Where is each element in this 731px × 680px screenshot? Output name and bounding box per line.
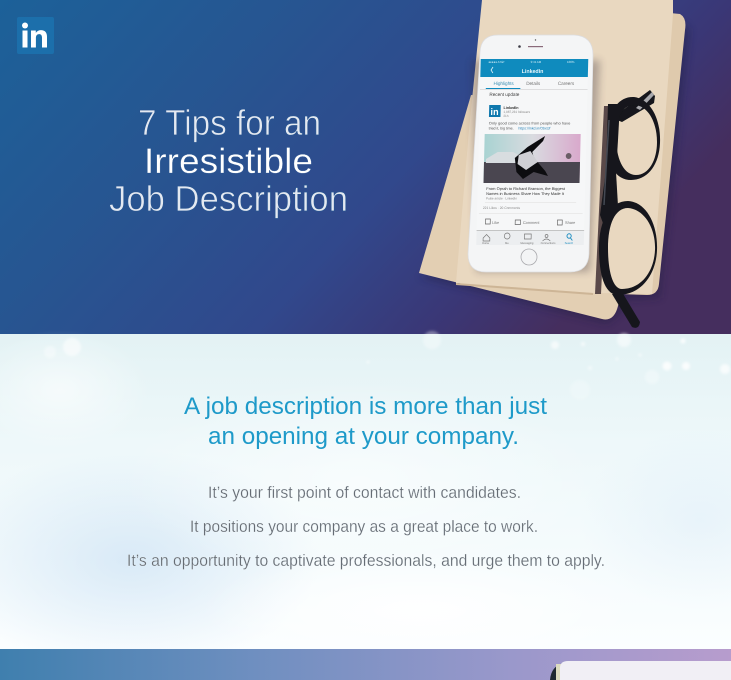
phone screen: LinkedIn: [522, 69, 543, 75]
glasses lower arm: [612, 292, 640, 328]
title line 3: Job Description: [109, 178, 348, 219]
app header: [480, 59, 588, 77]
heading: A job description is more than just: [184, 393, 547, 420]
notebook spiral: [550, 663, 564, 680]
phone screen: tried it, big time.: [489, 126, 514, 131]
phone screen: Details: [526, 81, 541, 86]
glasses bridge and hinge block: [600, 104, 620, 226]
text block: intro copy: It’s an opportunity to captivate professionals, and urge them to apply.: [127, 551, 605, 570]
text block: intro copy: It’s your first point of contact with candidates.: [208, 483, 521, 502]
tab bar: Connections: [541, 241, 556, 245]
tab bar: Messaging: [520, 241, 534, 245]
title line 1: 7 Tips for an: [138, 102, 321, 143]
panel: hero background: [0, 0, 731, 334]
notebook page: [560, 661, 731, 680]
home button: [521, 249, 537, 265]
phone screen: Pulse article · LinkedIn: [486, 196, 517, 201]
notebook: right back cover: [590, 12, 685, 295]
notebook edge: [456, 283, 593, 295]
phone screen: Names in Business Share How They Made It: [486, 192, 565, 196]
phone screen: 100%: [567, 60, 575, 64]
phone screen: ●●●●● AT&T: [488, 60, 505, 64]
heading: [184, 393, 547, 450]
phone screen: Recent update: [489, 92, 520, 97]
action row: Comment: [523, 220, 540, 225]
phone screen: https://lnkd.in/ObxtJf: [518, 126, 551, 131]
phone screen: 21h: [503, 114, 509, 118]
phone: [468, 35, 600, 272]
phone screen: 9:41 AM: [531, 60, 542, 64]
small LinkedIn badge: [489, 105, 501, 117]
phone screen: 221 Likes · 20 Comments: [483, 206, 520, 210]
glasses top arm: [612, 90, 655, 122]
glasses upper lens frame: [607, 97, 660, 180]
glasses lower lens frame: [599, 201, 657, 295]
text block: intro copy: It positions your company as a great place to work.: [190, 517, 538, 536]
phone screen: LinkedIn: [504, 106, 519, 110]
panel: next section band: [0, 649, 731, 680]
tab bar: Home: [482, 241, 490, 245]
glasses: [595, 90, 660, 328]
tabs: Highlights: [494, 81, 514, 86]
title: [109, 102, 348, 219]
text block: intro copy: [127, 483, 605, 570]
notebook: lowest: [419, 95, 640, 319]
notebook: top: [456, 0, 673, 294]
phone screen: Only good come across from people who have: [489, 121, 570, 126]
phone screen: [476, 59, 588, 245]
panel: intro section background: [0, 330, 731, 670]
bokeh: [44, 331, 730, 400]
action row: [485, 219, 575, 225]
phone screen: Careers: [558, 81, 575, 86]
heading: an opening at your company.: [208, 423, 519, 450]
tab bar: Search: [565, 241, 574, 245]
action row: Share: [565, 220, 575, 225]
glasses temple arm along the frame: [595, 106, 610, 294]
notebook shadow: [419, 20, 690, 324]
phone screen: 1,087,231 followers: [503, 110, 530, 114]
title line 2: Irresistible: [144, 142, 313, 181]
illustration: notebooks, phone and glasses: [419, 0, 690, 328]
tab bar: [476, 230, 584, 245]
icon: LinkedIn logo: [17, 17, 54, 54]
action row: Like: [492, 220, 499, 225]
small LinkedIn badge: in: [490, 107, 499, 117]
phone screen: From Oprah to Richard Branson, the Biggest: [486, 187, 566, 191]
tab bar: Me: [505, 241, 509, 245]
post photo: [484, 134, 581, 183]
